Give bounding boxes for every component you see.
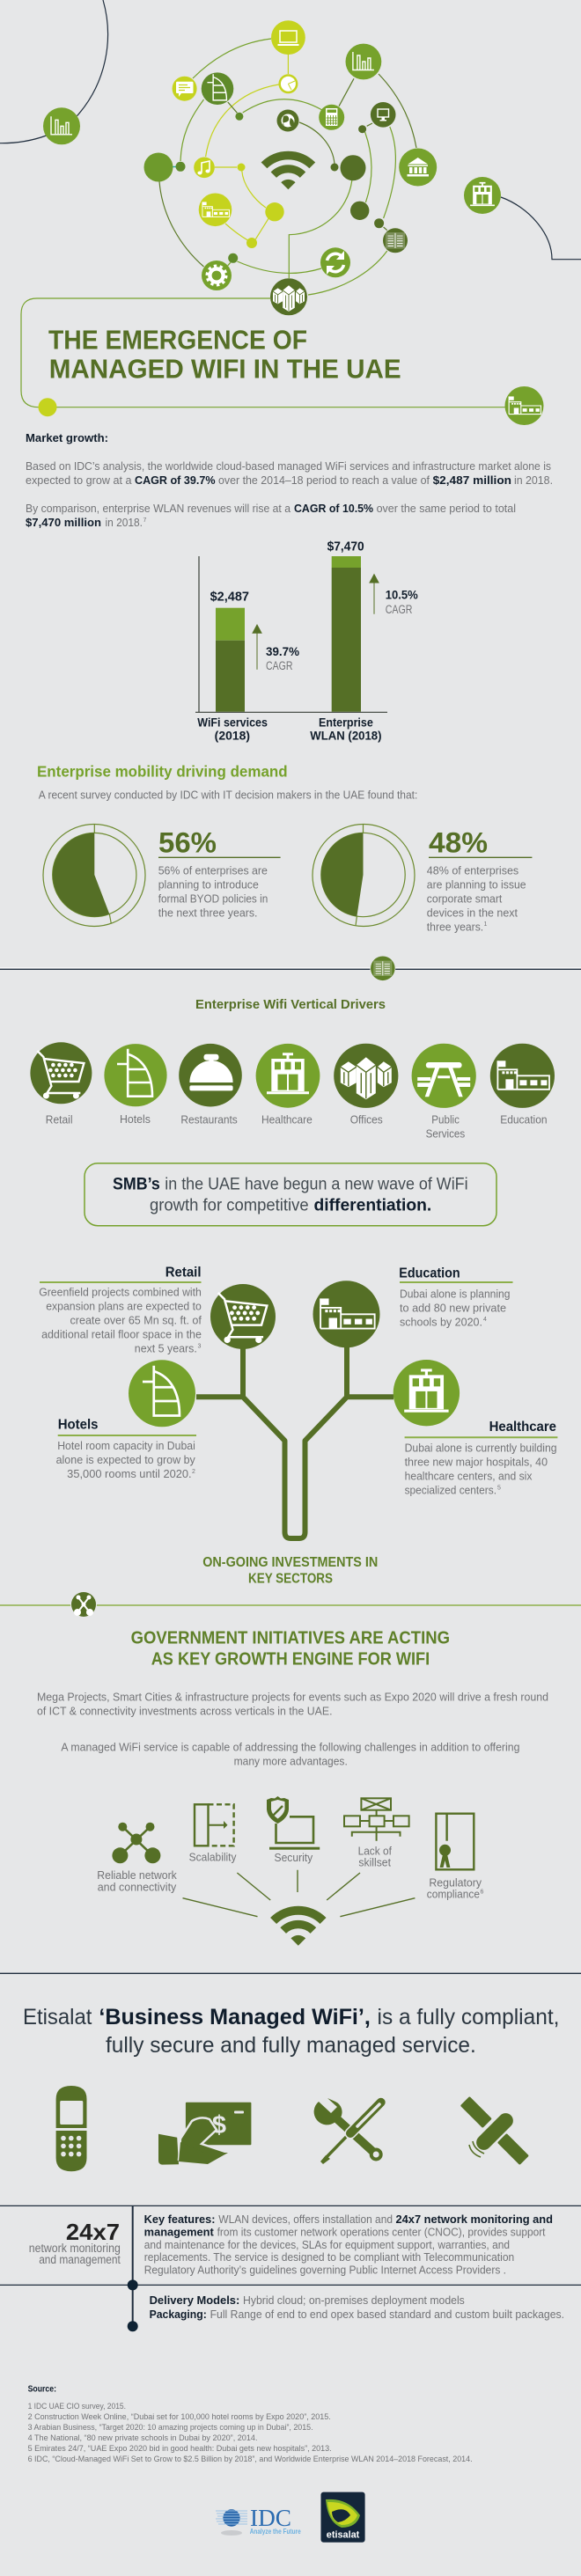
challenge: security [267,1796,320,1864]
title frame line [21,298,505,407]
node: globe [276,109,299,132]
branch: retail: create over 65 Mn sq. ft. of [70,1315,202,1327]
vertical: restaurants [179,1044,242,1127]
hero connector lines [159,39,416,295]
vertical: hotels: Hotels [120,1113,151,1126]
text: managed wifi intro: A managed WiFi service is capable of addressing the following challenges in addition to offering [61,1742,520,1754]
panel: challenges [97,1796,484,1946]
text: delivery and packaging: Packaging: [150,2308,207,2321]
node: calculator [319,105,344,130]
CAGR labels [266,589,418,672]
vertical: public services [412,1044,476,1141]
text: key features: and maintenance for the devices, SLAs for equipment support, warranties, and [144,2239,510,2251]
node: bar chart left [43,107,80,144]
branch: healthcare: three new major hospitals, 40 [405,1457,548,1469]
branch: hotels: Hotels [58,1418,99,1433]
branch: retail: additional retail floor space in the [41,1329,202,1341]
vertical: healthcare: Healthcare [261,1114,313,1127]
challenge: reliable network: Reliable network [97,1869,178,1882]
heading: etisalat business managed wifi: is a fully compliant, [377,2005,560,2029]
stat text: 48% of enterprises [427,864,518,877]
branch: education [313,1266,512,1347]
vertical: retail [30,1042,92,1127]
branch: education: 4 [483,1317,487,1323]
stat text: planning to introduce [158,878,259,891]
node: refresh [320,247,350,277]
sources [28,2385,473,2464]
panel: vertical driver icons [30,1042,555,1141]
text block: market growth: $2,487 million [433,474,511,487]
hero plain dots [144,113,384,263]
icon: phone [56,2086,86,2171]
text block: market growth: CAGR of 10.5% [294,503,373,515]
category labels: Enterprise [319,716,373,730]
node: education bottom right [505,386,544,425]
sources: 6 IDC, “Cloud-Managed WiFi Set to Grow to $2.5 Billion by 2018”, and Worldwide Enterprise WLAN 2014–2018 Forecast, 2014. [28,2455,473,2464]
value labels: $7,470 [327,540,364,554]
branch: healthcare: specialized centers. [405,1485,496,1497]
24x7 callout: network monitoring [29,2242,121,2255]
branch: retail [39,1265,276,1355]
text block: market growth: Market growth: [26,431,108,444]
text: key features: WLAN devices, offers installation and [218,2213,393,2226]
challenge: security: Security [275,1852,313,1864]
CAGR labels: 10.5% [386,589,418,602]
branch: retail: expansion plans are expected to [46,1301,202,1313]
vertical: offices: Offices [350,1114,383,1127]
title [48,325,401,384]
challenge: scalability [189,1804,237,1864]
callout: SMB growth: SMB’s [113,1176,160,1194]
stat text: are planning to issue [427,878,526,891]
timeline [128,2205,138,2331]
sources: 1 IDC UAE CIO survey, 2015. [28,2402,126,2411]
text: key features: management [144,2226,215,2238]
node: towers [270,278,307,315]
CAGR labels: CAGR [266,659,293,672]
logo: IDC [216,2505,301,2536]
node: healthcare right [464,177,501,214]
branch: healthcare [393,1360,557,1497]
stat text: 1 [484,921,488,928]
stat text: corporate smart [427,892,503,905]
branch: healthcare: 5 [497,1486,501,1491]
vertical: offices [334,1044,398,1127]
sources: 5 Emirates 24/7, “UAE Expo 2020 bid in good health: Dubai gets new hospitals”, 2013. [28,2444,332,2454]
challenge: lack of skillset: Lack of [358,1845,392,1857]
CAGR labels: CAGR [386,603,413,616]
chart axes [195,556,387,712]
text block: market growth: CAGR of 39.7% [135,474,215,487]
text: survey intro: A recent survey conducted by IDC with IT decision makers in the UAE found that: [39,789,417,802]
text: delivery and packaging: Hybrid cloud; on-premises deployment models [243,2294,465,2307]
branch: hotels: 2 [192,1469,195,1475]
logo: IDC: IDC [250,2505,291,2531]
bar: WiFi services [216,608,245,712]
node: laptop [271,20,305,55]
text block: market growth: in 2018. [106,517,143,529]
text block: market growth: in 2018. [514,474,553,487]
vertical: public services: Public [431,1114,460,1127]
challenge: reliable network [97,1823,178,1893]
logo: etisalat [320,2492,365,2543]
tree caption [202,1555,378,1587]
node: book [383,228,408,253]
challenge: regulatory compliance [427,1814,484,1901]
callout: SMB growth: differentiation. [313,1197,431,1215]
text: key features: from its customer network operations center (CNOC), provides support [217,2226,546,2238]
branch: retail: Retail [165,1265,201,1280]
category labels: WiFi services [197,716,268,730]
text: managed wifi intro: many more advantages. [234,1756,348,1768]
vertical: retail: Retail [46,1114,72,1127]
rays to wifi [183,1870,415,1917]
text: delivery and packaging: Delivery Models: [150,2294,239,2307]
bar chart: WiFi services vs enterprise WLAN [195,540,418,742]
sources: 3 Arabian Business, “Target 2020: 10 amazing projects coming up in Dubai”, 2015. [28,2423,313,2433]
node: music [194,157,215,178]
branch: retail: next 5 years. [135,1343,197,1355]
node: monitor [371,102,396,128]
stat text [427,864,526,933]
stat value: 48% [429,826,488,858]
challenge: reliable network: and connectivity [98,1881,177,1893]
sources: 4 The National, “80 new private schools in Dubai by 2020”, 2014. [28,2433,257,2443]
icon: satellite [460,2096,529,2165]
pie: 48% [313,824,415,926]
panel: features [0,2205,581,2331]
branch: retail: 3 [197,1343,201,1350]
icon: network divider [70,1591,97,1618]
panel: 56% stat [43,824,281,926]
24x7 callout: 24x7 [66,2219,120,2245]
tree diagram: on-going investments [39,1265,557,1587]
value labels [210,540,364,605]
heading: etisalat business managed wifi [23,2005,560,2058]
branch: hotels [56,1360,196,1480]
branch: education: to add 80 new private [400,1302,506,1314]
challenge: regulatory compliance: Regulatory [429,1876,482,1889]
text: key features [144,2213,553,2277]
text: delivery and packaging: Full Range of end to end opex based standard and custom built packages. [210,2308,564,2321]
text block: market growth: 7 [143,517,146,524]
callout: SMB growth: growth for competitive [150,1197,309,1215]
bar: Enterprise WLAN [332,556,361,712]
stat text: 56% of enterprises are [158,864,268,877]
heading: enterprise mobility: Enterprise mobility driving demand [37,763,288,781]
node: hotel [202,72,233,105]
heading: government initiatives: AS KEY GROWTH ENGINE FOR WIFI [151,1650,430,1670]
vertical: hotels [104,1044,167,1126]
stat rule [429,856,532,858]
text: mega projects [37,1691,548,1717]
challenge: lack of skillset [344,1798,409,1869]
node: gear [202,261,232,290]
text: mega projects: Mega Projects, Smart Cities & infrastructure projects for events such as Expo 2020 will drive a fresh round [37,1691,548,1703]
branch: retail: Greenfield projects combined with [39,1287,202,1299]
stat rule [158,856,281,858]
vertical: education [490,1044,555,1127]
stat text: three years. [427,921,483,933]
callout: SMB growth [85,1163,496,1226]
navy arc right [501,197,581,260]
branch: healthcare: Healthcare [489,1420,556,1435]
text block: market growth: over the same period to total [377,503,516,515]
heading: vertical drivers: Enterprise Wifi Vertical Drivers [195,997,386,1012]
text: key features: Key features: [144,2213,215,2226]
logo: etisalat: etisalat [327,2530,360,2541]
node: education lime [199,194,232,226]
pie: 56% [43,824,145,926]
vertical: education: Education [500,1114,548,1127]
stat value: 56% [158,826,217,858]
heading: government initiatives: GOVERNMENT INITIATIVES ARE ACTING [131,1629,450,1648]
node: bank [399,148,437,187]
node: lime dot [39,398,56,416]
text block: market growth: expected to grow at a [26,474,132,487]
challenge: lack of skillset: skillset [358,1857,392,1869]
text: key features: replacements. The service is designed to be compliant with Telecommunication [144,2251,514,2264]
vertical: public services: Services [426,1128,465,1141]
text block: market growth: Based on IDC’s analysis, the worldwide cloud-based managed WiFi services and infrastructure market alone is [26,460,551,473]
text block: market growth: over the 2014–18 period to reach a value of [218,474,430,487]
logo: IDC: Analyze the Future [250,2528,301,2536]
panel: service icons [56,2086,529,2171]
sources: Source: [28,2385,56,2395]
text: key features: 24x7 network monitoring and [396,2213,553,2226]
branch: hotels: alone is expected to grow by [56,1454,196,1466]
text block: market growth: By comparison, enterprise WLAN revenues will rise at a [26,503,290,515]
branch: hotels: Hotel room capacity in Dubai [57,1440,195,1452]
vertical: restaurants: Restaurants [180,1114,238,1127]
24x7 callout: and management [39,2253,121,2266]
tree caption: KEY SECTORS [248,1572,333,1587]
panel: 48% stat [313,824,532,933]
text: key features: Regulatory Authority’s guidelines governing Public Internet Access Providers . [144,2264,506,2277]
callout: SMB growth: in the UAE have begun a new wave of WiFi [165,1176,468,1194]
heading: etisalat business managed wifi: ‘Business Managed WiFi’, [99,2005,371,2029]
stat text: the next three years. [158,906,257,919]
branch: healthcare: Dubai alone is currently building [405,1442,557,1455]
text block: market growth: $7,470 million [26,517,101,529]
value labels: $2,487 [210,591,249,605]
category labels [197,716,382,742]
stat text: devices in the next [427,906,518,919]
node: bar chart top right [345,44,381,79]
category labels: WLAN (2018) [310,729,382,742]
category labels: (2018) [215,729,250,742]
branch: education: Dubai alone is planning [400,1288,511,1300]
icon: tools [314,2098,383,2164]
challenge: regulatory compliance: 6 [481,1889,484,1896]
title: THE EMERGENCE OF [48,325,307,356]
challenge: regulatory compliance: compliance [427,1889,480,1901]
arrow: 10.5% [370,575,379,614]
text: mega projects: of ICT & connectivity investments across verticals in the UAE. [37,1705,333,1717]
vertical: healthcare [256,1044,320,1127]
branch: hotels: 35,000 rooms until 2020. [67,1468,192,1480]
24x7 callout [29,2219,121,2266]
icon: central wifi [261,151,315,189]
branch: healthcare: healthcare centers, and six [405,1471,533,1483]
arrow: 39.7% [253,625,261,670]
title: MANAGED WIFI IN THE UAE [49,353,401,384]
stat text [158,864,268,919]
text: managed wifi intro [61,1742,520,1768]
text block: market growth [26,431,553,529]
hero: wifi network diagram [0,0,581,425]
sources: 2 Construction Week Online, “Dubai set for 100,000 hotel rooms by Expo 2020”, 2015. [28,2412,331,2422]
heading: etisalat business managed wifi: fully secure and fully managed service. [106,2033,476,2058]
CAGR labels: 39.7% [266,645,299,658]
node: pie clock [278,74,298,93]
branch: education: schools by 2020. [400,1316,482,1328]
navy arc top left [0,0,108,143]
stat text: formal BYOD policies in [158,892,268,905]
heading: etisalat business managed wifi: Etisalat [23,2005,92,2029]
branch: education: Education [399,1266,460,1281]
icon: wifi [270,1906,327,1946]
icon: hand with card [158,2103,251,2165]
tree caption: ON-GOING INVESTMENTS IN [202,1555,378,1570]
heading: government initiatives [131,1629,450,1670]
text: delivery and packaging [150,2294,564,2321]
node: chat bubble [173,77,197,101]
icon: hand with card: $ [212,2111,226,2139]
icon: book divider [370,956,395,981]
tree trunk and branches [196,1347,393,1538]
challenge: scalability: Scalability [189,1852,237,1864]
